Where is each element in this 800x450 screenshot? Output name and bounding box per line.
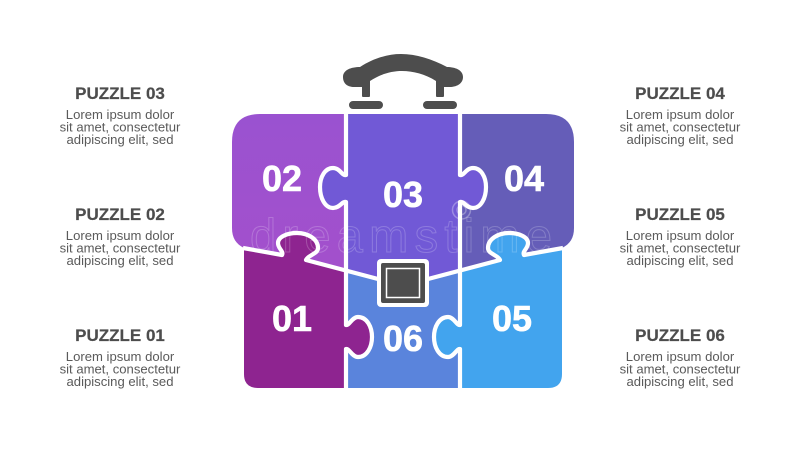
number 01: 01 — [272, 298, 312, 339]
caption: puzzle 04: sit amet, consectetur — [620, 120, 741, 134]
number 02: 02 — [262, 158, 302, 199]
caption: puzzle 06: adipiscing elit, sed — [626, 374, 734, 389]
caption: puzzle 01 — [60, 326, 181, 389]
piece 05 — [434, 233, 562, 388]
buckle — [377, 259, 429, 307]
caption: puzzle 01: sit amet, consectetur — [60, 362, 181, 376]
caption: puzzle 03: adipiscing elit, sed — [66, 132, 174, 147]
caption: puzzle 02: sit amet, consectetur — [60, 240, 181, 256]
caption: puzzle 01: PUZZLE 01 — [75, 326, 165, 345]
caption: puzzle 04: PUZZLE 04 — [635, 84, 725, 103]
caption: puzzle 05: adipiscing elit, sed — [626, 253, 734, 268]
piece 06 — [346, 271, 460, 388]
piece 01 — [244, 233, 372, 388]
caption: puzzle 05: Lorem ipsum dolor — [626, 228, 735, 243]
caption: puzzle 03: PUZZLE 03 — [75, 84, 165, 103]
caption: puzzle 03 — [60, 84, 181, 147]
caption: puzzle 06: sit amet, consectetur — [620, 362, 741, 376]
caption: puzzle 06 — [620, 326, 741, 389]
caption: puzzle 04: Lorem ipsum dolor — [626, 107, 735, 122]
caption: puzzle 05: sit amet, consectetur — [620, 240, 741, 256]
caption: puzzle 01: Lorem ipsum dolor — [66, 349, 175, 364]
caption: puzzle 03: sit amet, consectetur — [60, 120, 181, 134]
caption: puzzle 05: PUZZLE 05 — [635, 205, 725, 224]
caption: puzzle 05 — [620, 205, 741, 268]
caption: puzzle 04 — [620, 84, 741, 147]
number 06: 06 — [383, 318, 423, 359]
caption: puzzle 01: adipiscing elit, sed — [66, 374, 174, 389]
caption: puzzle 04: adipiscing elit, sed — [626, 132, 734, 147]
caption: puzzle 02: PUZZLE 02 — [75, 205, 165, 224]
number 03: 03 — [383, 174, 423, 215]
piece 03 — [320, 114, 486, 286]
caption: puzzle 06: PUZZLE 06 — [635, 326, 725, 345]
caption: puzzle 03: Lorem ipsum dolor — [66, 107, 175, 122]
number 05: 05 — [492, 298, 532, 339]
briefcase puzzle — [232, 54, 574, 390]
caption: puzzle 02 — [60, 205, 181, 268]
piece 04 — [460, 114, 574, 271]
handle — [343, 54, 463, 109]
caption: puzzle 02: Lorem ipsum dolor — [66, 228, 175, 243]
caption: puzzle 02: adipiscing elit, sed — [66, 253, 174, 268]
number 04: 04 — [504, 158, 544, 199]
white seams — [243, 112, 563, 390]
caption: puzzle 06: Lorem ipsum dolor — [626, 349, 735, 364]
watermark: dreamstime — [250, 209, 552, 262]
piece 02 — [232, 114, 346, 271]
